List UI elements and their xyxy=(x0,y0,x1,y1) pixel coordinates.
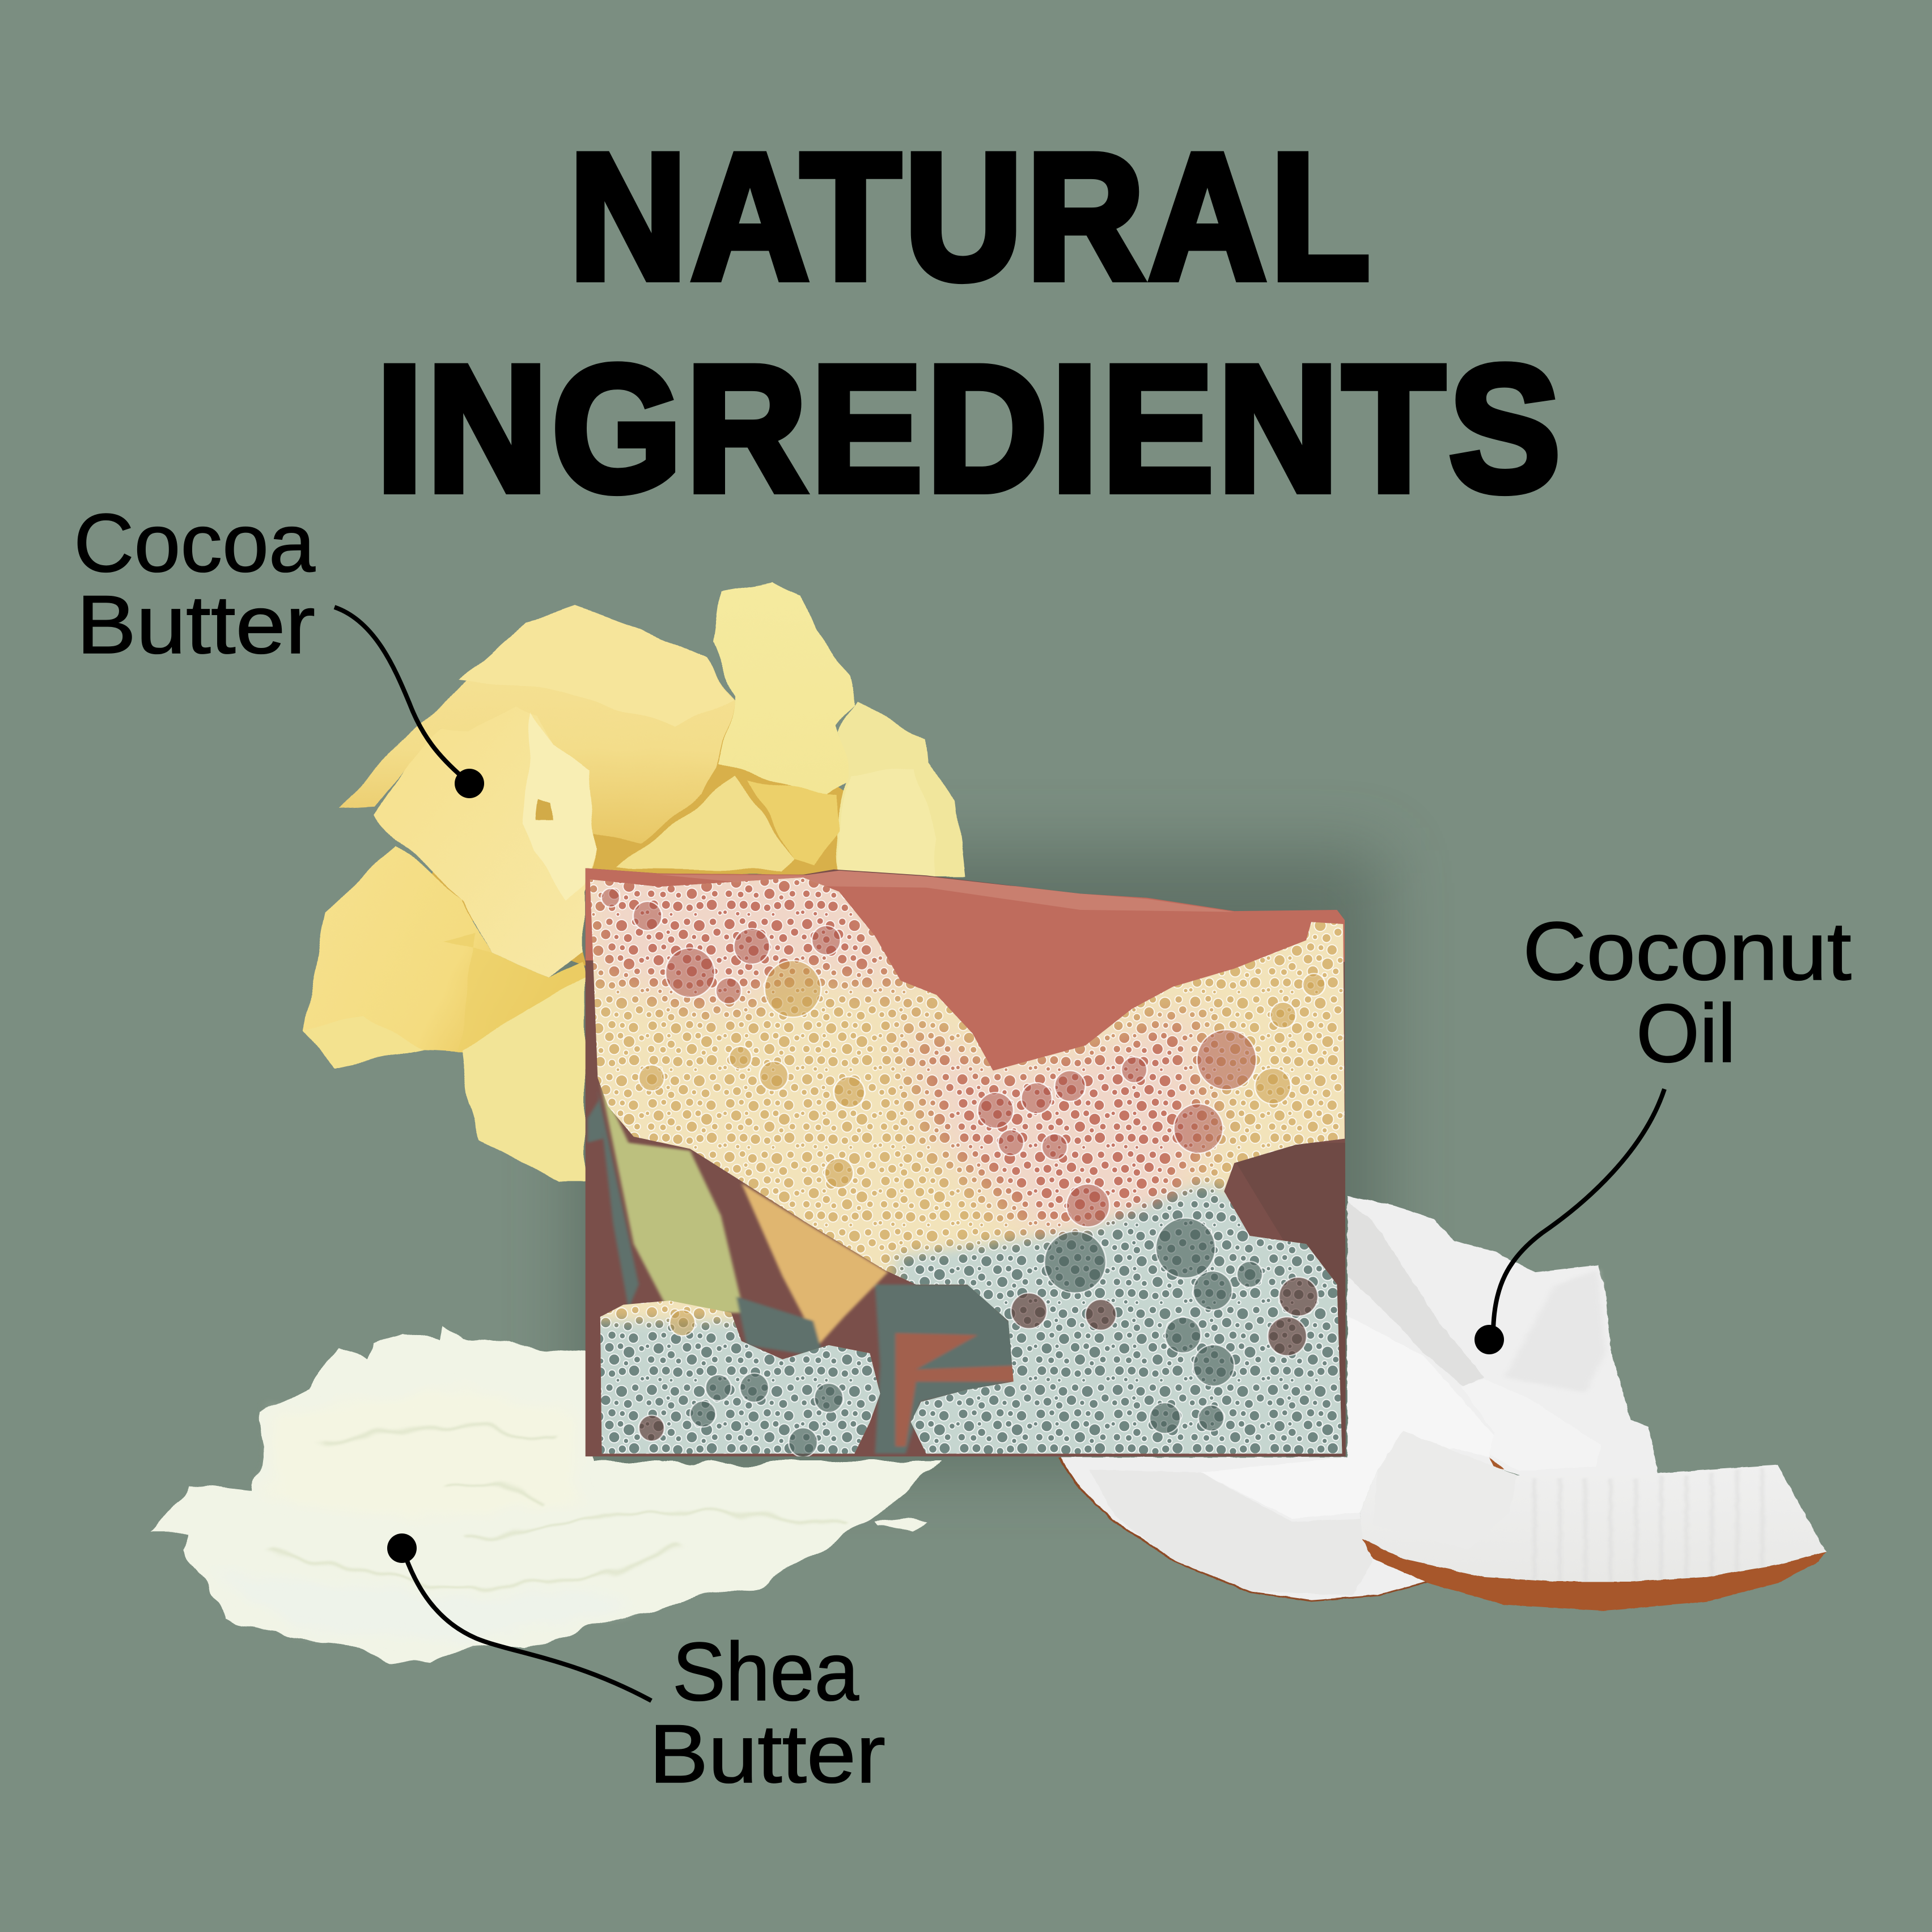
cocoa front chunk xyxy=(375,706,596,976)
foam bubble texture: pink xyxy=(567,839,1368,1471)
cocoa right chunk xyxy=(836,700,965,876)
coconut facet xyxy=(1461,1379,1600,1471)
foam base tint xyxy=(567,839,1368,1471)
cocoa bottom chunk xyxy=(462,976,584,1182)
label: shea butter: Butter xyxy=(649,1708,886,1800)
large pink bubbles xyxy=(601,888,1256,1227)
coconut ridge xyxy=(1348,1202,1484,1387)
title: NATURAL xyxy=(569,116,1374,316)
soap shadow on background xyxy=(573,850,1383,1468)
soap yellow stripe xyxy=(742,1183,888,1345)
callout: shea butter xyxy=(387,1533,886,1800)
shea highlights xyxy=(272,1389,575,1520)
ingredient: cocoa butter xyxy=(304,583,965,1182)
leader: shea butter xyxy=(405,1556,651,1701)
dot: shea butter xyxy=(387,1533,417,1563)
leader: cocoa butter xyxy=(334,607,462,777)
foam bubble texture: warm xyxy=(567,839,1368,1471)
label: cocoa butter xyxy=(74,497,316,671)
shea ridges xyxy=(266,1427,847,1588)
cocoa inner amber piece xyxy=(747,781,838,864)
cocoa top chunk facets xyxy=(462,607,732,727)
coconut front shell xyxy=(1363,1539,1826,1611)
large yellow bubbles xyxy=(639,960,1325,1336)
soap maroon swirls xyxy=(896,1333,1019,1446)
ingredient: coconut xyxy=(1059,1196,1826,1611)
dot: coconut oil xyxy=(1475,1325,1504,1354)
coconut shell edge xyxy=(1059,1457,1429,1601)
soap green stripe xyxy=(600,1082,744,1313)
coconut shell sliver xyxy=(1489,1457,1505,1469)
title xyxy=(376,116,1565,528)
soap terracotta layer xyxy=(586,863,1353,1082)
foam bubble texture: cool xyxy=(567,839,1368,1471)
soap base maroon xyxy=(585,868,1346,1457)
cocoa dark gaps xyxy=(425,700,848,966)
coconut front fibres xyxy=(1535,1468,1762,1582)
coconut front chunk xyxy=(1372,1431,1517,1549)
large maroon bubbles xyxy=(639,1277,1318,1441)
foam layers xyxy=(567,839,1368,1471)
coconut back piece xyxy=(1059,1196,1659,1601)
label: coconut oil: Oil xyxy=(1636,987,1736,1079)
coconut white plane xyxy=(1201,1316,1494,1519)
dot: cocoa butter xyxy=(455,769,484,798)
cocoa top chunk xyxy=(337,607,734,844)
coconut lower textured flesh xyxy=(1089,1469,1372,1595)
title: INGREDIENTS xyxy=(376,328,1565,528)
callout: coconut oil xyxy=(1475,905,1852,1354)
label: coconut oil xyxy=(1523,905,1852,1079)
label: shea butter xyxy=(649,1625,886,1800)
cocoa top right chunk xyxy=(714,583,854,798)
shea small fleck xyxy=(876,1518,923,1528)
label: coconut oil: Coconut xyxy=(1523,905,1852,997)
label: shea butter: Shea xyxy=(672,1625,859,1718)
label: cocoa butter: Butter xyxy=(77,578,315,671)
coconut front flesh xyxy=(1360,1431,1826,1582)
leader: coconut oil xyxy=(1493,1089,1664,1332)
soap grey-teal stripes xyxy=(736,1285,1014,1454)
soap bar xyxy=(585,868,1346,1457)
callout: cocoa butter xyxy=(74,497,484,798)
soap right brown patch xyxy=(1236,1143,1346,1457)
large teal bubbles xyxy=(690,1218,1262,1457)
shea smear xyxy=(150,1324,939,1664)
infographic canvas xyxy=(77,151,1852,1783)
ingredient: shea butter xyxy=(150,1324,939,1664)
soap top ridge xyxy=(659,871,1234,912)
coconut back shading xyxy=(1505,1270,1605,1393)
cocoa center chunk xyxy=(617,777,793,870)
cocoa lower left chunk xyxy=(304,845,584,1068)
label: cocoa butter: Cocoa xyxy=(74,497,316,589)
